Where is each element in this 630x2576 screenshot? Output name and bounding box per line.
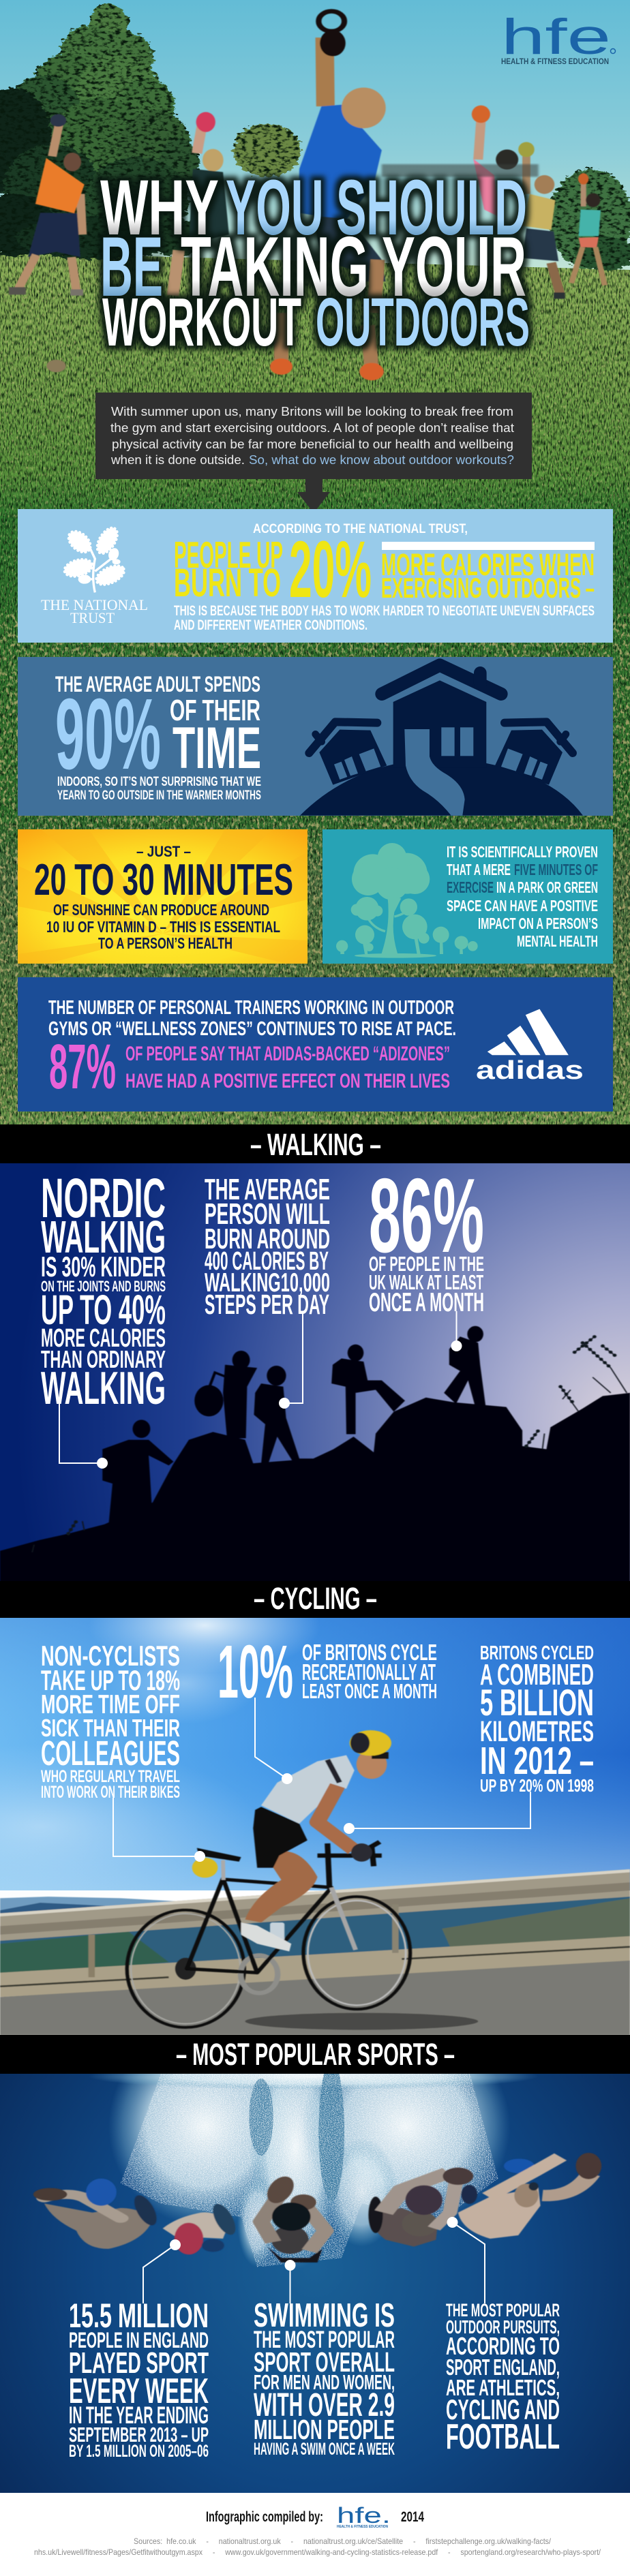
text: reason explanation — [174, 603, 595, 633]
connector: swimming to swimmer — [285, 2260, 296, 2303]
stat: 10% cycle monthly: LEAST ONCE A MONTH — [302, 1679, 437, 1703]
icon: National Trust oak leaf — [63, 525, 127, 592]
text: vitamin D: 10 IU OF VITAMIN D – THIS IS ESSENTIAL — [46, 918, 280, 936]
text: swimming most popular: HAVING A SWIM ONCE A WEEK — [254, 2440, 395, 2459]
stat: 86% walk monthly — [369, 1156, 484, 1317]
text: 15.5 million play sport: IN THE YEAR ENDING — [69, 2402, 209, 2429]
text: swimming most popular: SPORT OVERALL — [254, 2346, 395, 2378]
logo text: The National Trust: TRUST — [70, 609, 115, 626]
footer credit: HEALTH & FITNESS EDUCATION — [337, 2525, 388, 2529]
intro text box: physical activity can be far more beneficial to our health and wellbeing — [112, 437, 513, 451]
panel: 90% of time indoors — [18, 657, 613, 816]
text: of their time: OF THEIR — [170, 694, 260, 727]
text: swimming most popular — [254, 2297, 395, 2459]
footer credit: hfe. — [337, 2503, 391, 2528]
panel: National Trust calories — [18, 509, 613, 643]
logo: HFE health and fitness education — [501, 10, 615, 66]
footer credit: Infographic compiled by: — [206, 2509, 323, 2525]
text: 15.5 million play sport: PLAYED SPORT — [69, 2346, 209, 2380]
footer credit: 2014 — [401, 2509, 424, 2525]
text: of their time: TIME — [172, 716, 261, 781]
text: according to the National Trust: ACCORDING TO THE NATIONAL TRUST, — [253, 522, 468, 536]
stat: 10% cycle monthly: OF BRITONS CYCLE — [302, 1640, 437, 1665]
text: scientifically proven: EXERCISE — [447, 878, 494, 896]
text: indoors note: YEARN TO GO OUTSIDE IN THE WARMER MONTHS — [57, 788, 261, 803]
text: 15.5 million play sport: PEOPLE IN ENGLAND — [69, 2328, 209, 2352]
intro text box: So, what do we know about outdoor workouts? — [249, 453, 514, 467]
connector: non-cyclists to saddle — [113, 1798, 205, 1862]
text: non-cyclists: TAKE UP TO 18% — [41, 1664, 180, 1696]
logo: HFE health and fitness education: HEALTH & FITNESS EDUCATION — [501, 58, 609, 66]
photo: cyclist on mountain road — [0, 1578, 630, 2035]
logo text: The National Trust: THE NATIONAL — [41, 596, 148, 613]
title — [100, 164, 530, 361]
section band: most popular sports — [0, 2035, 630, 2074]
text: outdoor pursuits: ARE ATHLETICS, — [446, 2375, 560, 2400]
text: of their time — [170, 694, 261, 781]
white bar — [382, 542, 595, 550]
stat: 86% walk monthly: OF PEOPLE IN THE — [369, 1252, 484, 1276]
section band: walking — [0, 1124, 630, 1164]
stat: 86% walk monthly: 86% — [369, 1156, 484, 1274]
icon: trees — [336, 843, 478, 958]
stat: 5 billion kilometres — [480, 1642, 594, 1796]
text: reason explanation: AND DIFFERENT WEATHER CONDITIONS. — [174, 617, 368, 633]
section band: most popular sports: – MOST POPULAR SPORTS – — [176, 2037, 455, 2072]
text: adizones effect — [125, 1043, 450, 1092]
text: indoors note: INDOORS, SO IT’S NOT SURPRISING THAT WE — [57, 775, 261, 789]
stat: 10% cycle monthly — [217, 1630, 437, 1714]
text: outdoor pursuits — [446, 2300, 560, 2457]
text: 15.5 million play sport: BY 1.5 MILLION ON 2005–06 — [69, 2442, 209, 2461]
text: nordic walking: ON THE JOINTS AND BURNS — [41, 1278, 166, 1295]
intro text box: the gym and start exercising outdoors. A lot of people don’t realise that — [110, 420, 514, 435]
stat: 86% walk monthly: UK WALK AT LEAST — [369, 1270, 483, 1294]
sources — [34, 2536, 601, 2557]
text: non-cyclists: WHO REGULARLY TRAVEL — [41, 1767, 180, 1786]
connector: nordic to hiker — [59, 1404, 108, 1469]
text: swimming most popular: WITH OVER 2.9 — [254, 2387, 395, 2423]
sports facts — [69, 2217, 560, 2461]
stat text: more calories when exercising outdoors — [381, 547, 595, 604]
cycling facts — [41, 1630, 594, 1862]
text: vitamin D: TO A PERSON’S HEALTH — [98, 934, 232, 952]
text: nordic walking: WALKING — [41, 1362, 166, 1414]
connector: 5 billion to rider — [344, 1792, 530, 1834]
stat: 10% cycle monthly: RECREATIONALLY AT — [302, 1659, 436, 1685]
footer credit — [206, 2503, 424, 2529]
text: nordic walking: NORDIC — [41, 1167, 166, 1229]
text: vitamin D: OF SUNSHINE CAN PRODUCE AROUND — [53, 901, 269, 919]
footer — [0, 2493, 630, 2576]
text: 10,000 steps: BURN AROUND — [205, 1223, 330, 1255]
stat: people burn up to 20%: 20% — [289, 525, 372, 615]
logo: HFE health and fitness education: hfe — [501, 10, 611, 65]
text: nordic walking: MORE CALORIES — [41, 1324, 166, 1353]
sources: Sources: hfe.co.uk - nationaltrust.org.uk - nationaltrust.org.uk/ce/Satellite - firststepchallenge.org.uk/walking-facts/ — [134, 2536, 552, 2546]
text: non-cyclists — [41, 1640, 180, 1802]
stat: people burn up to 20%: BURN TO — [174, 561, 281, 605]
intro text box: With summer upon us, many Britons will be looking to break free from — [111, 404, 513, 418]
intro text box — [95, 393, 532, 479]
text: 10,000 steps: WALKING10,000 — [205, 1268, 330, 1298]
panel: personal trainers and adizones — [18, 977, 613, 1111]
arrow: intro down to panels — [297, 479, 330, 513]
text: non-cyclists: COLLEAGUES — [41, 1734, 180, 1773]
text: non-cyclists: SICK THAN THEIR — [41, 1714, 180, 1742]
text: vitamin D — [46, 901, 280, 952]
text: non-cyclists: NON-CYCLISTS — [41, 1640, 180, 1672]
photo: hikers at dusk — [0, 1163, 630, 1608]
intro text box: when it is done outside. — [110, 453, 245, 467]
stat: 86% walk monthly: ONCE A MONTH — [369, 1288, 484, 1317]
text: average adult: THE AVERAGE ADULT SPENDS — [55, 672, 260, 696]
text: non-cyclists: MORE TIME OFF — [41, 1690, 180, 1719]
stat: 10% cycle monthly: 10% — [217, 1630, 293, 1714]
text: nordic walking: UP TO 40% — [41, 1287, 166, 1333]
text: swimming most popular: MILLION PEOPLE — [254, 2414, 395, 2445]
panel: 20 to 30 minutes of sunshine — [18, 829, 308, 964]
title: BE — [100, 220, 163, 314]
text: 10,000 steps: PERSON WILL — [205, 1197, 330, 1231]
title: WORKOUT — [102, 284, 301, 361]
logo: adidas — [476, 1009, 584, 1085]
background photo: park workout with grass — [0, 0, 630, 1124]
text: 10,000 steps — [205, 1173, 330, 1320]
text: nordic walking: IS 30% KINDER — [41, 1251, 166, 1283]
section band: cycling: – CYCLING – — [254, 1581, 377, 1616]
text: non-cyclists: INTO WORK ON THEIR BIKES — [41, 1783, 180, 1802]
text: 15.5 million play sport: SEPTEMBER 2013 – UP — [69, 2423, 209, 2447]
text: swimming most popular: THE MOST POPULAR — [254, 2327, 395, 2353]
text: swimming most popular: FOR MEN AND WOMEN, — [254, 2370, 395, 2394]
stat: people burn up to 20%: PEOPLE UP — [174, 534, 283, 576]
text: 15.5 million play sport — [69, 2297, 209, 2461]
walking facts — [41, 1156, 484, 1469]
logo text: The National Trust — [41, 596, 148, 626]
connector: sport to swimmer — [143, 2239, 181, 2303]
title: WHY — [100, 164, 219, 251]
stat: 87%: 87% — [49, 1031, 116, 1102]
stat: 90%: 90% — [55, 678, 161, 791]
connector: steps to hiker — [279, 1314, 303, 1409]
connector: 86% to hiker — [451, 1311, 462, 1351]
text: personal trainers — [48, 997, 456, 1040]
connector: pursuits to swimmer — [447, 2217, 485, 2303]
text: scientifically proven — [447, 843, 598, 950]
photo: swimmers underwater — [0, 2074, 630, 2493]
text: indoors note — [57, 775, 261, 803]
text: scientifically proven: THAT A MERE — [447, 861, 511, 878]
logo: adidas: adidas — [476, 1056, 584, 1085]
text: swimming most popular: SWIMMING IS — [254, 2297, 395, 2334]
text: nordic walking — [41, 1167, 166, 1414]
text: 15.5 million play sport: EVERY WEEK — [69, 2372, 209, 2411]
section band: cycling — [0, 1581, 630, 1618]
text: just: – JUST – — [136, 843, 191, 860]
text: 10,000 steps: STEPS PER DAY — [205, 1289, 329, 1320]
text: nordic walking: WALKING — [41, 1212, 166, 1263]
text: 10,000 steps: 400 CALORIES BY — [205, 1247, 329, 1276]
stat: people burn up to 20% — [174, 525, 372, 615]
icon: houses on a hill — [300, 665, 583, 816]
text: 15.5 million play sport: 15.5 MILLION — [69, 2297, 209, 2335]
text: 10,000 steps: THE AVERAGE — [205, 1173, 330, 1206]
stat: 20 to 30 minutes: 20 TO 30 MINUTES — [34, 855, 293, 904]
connector: 10% to rider — [255, 1698, 292, 1784]
panel: five minutes in a green space — [322, 829, 613, 964]
text: nordic walking: THAN ORDINARY — [41, 1345, 166, 1373]
text: adizones effect: HAVE HAD A POSITIVE EFFECT ON THEIR LIVES — [125, 1070, 450, 1092]
section band: walking: – WALKING – — [250, 1127, 381, 1162]
